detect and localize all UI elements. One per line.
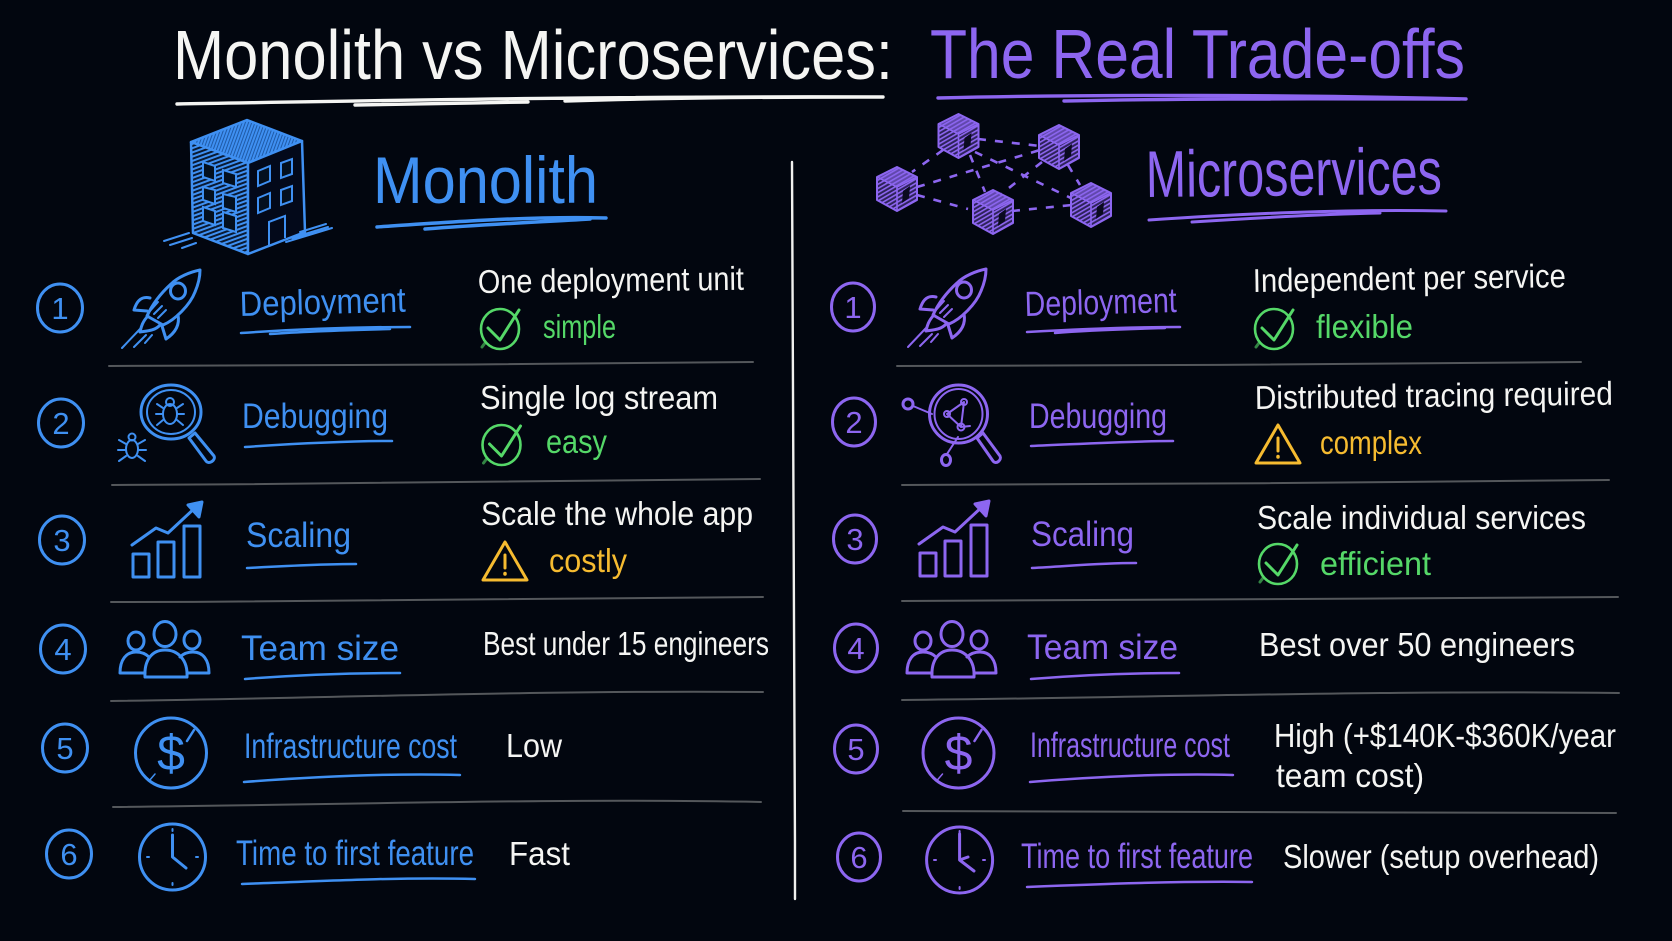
value: Single log stream — [480, 379, 718, 416]
icon: dollar: $ — [157, 725, 185, 781]
heading: monolith: Monolith — [373, 143, 598, 217]
label: Team size — [1027, 628, 1178, 667]
row 2: debugging — [832, 375, 1613, 466]
center divider — [792, 162, 795, 899]
icon: growth chart — [919, 501, 989, 576]
icon: rocket — [908, 269, 986, 347]
number 1: 1 — [844, 290, 862, 325]
number 1 — [832, 283, 874, 331]
label: Scaling — [1031, 515, 1134, 554]
label: Time to first feature — [1021, 837, 1253, 876]
row 1: deployment — [832, 257, 1566, 349]
row 3: scaling — [40, 495, 753, 580]
number 5: 5 — [847, 732, 865, 767]
icon: rocket — [122, 270, 200, 348]
badge: efficient — [1259, 544, 1431, 584]
icon: clock — [140, 824, 206, 890]
icon: dollar: $ — [945, 725, 972, 781]
icon: team — [907, 622, 996, 677]
label underline — [245, 441, 392, 447]
row 3: scaling — [834, 499, 1586, 584]
badge: easy: easy — [546, 423, 607, 460]
number 6: 6 — [60, 837, 78, 872]
icon: magnifier with network — [903, 385, 1000, 466]
label underline — [242, 878, 475, 884]
number 4 — [834, 624, 878, 672]
title underline: white — [177, 97, 883, 105]
row 5: infrastructure cost — [834, 717, 1616, 794]
badge: complex: complex — [1320, 424, 1422, 461]
number 3 — [834, 515, 876, 563]
title underline: purple — [938, 95, 1466, 101]
icon: dollar — [923, 718, 994, 788]
value: Best over 50 engineers — [1259, 626, 1575, 663]
title: The Real Trade-offs — [930, 15, 1465, 93]
label: Debugging — [242, 397, 388, 436]
number 3: 3 — [53, 523, 71, 558]
panel: microservices — [832, 114, 1619, 893]
heading underline — [377, 218, 606, 229]
label underline — [1031, 673, 1179, 679]
value: High (+$140K-$360K/year — [1274, 717, 1616, 754]
value: Fast — [509, 835, 570, 872]
number 6 — [46, 830, 92, 878]
badge: costly: costly — [549, 542, 627, 579]
number 2: 2 — [845, 405, 863, 440]
icon: building — [164, 120, 332, 254]
row 5: infrastructure cost — [42, 718, 562, 788]
value: Slower (setup overhead) — [1283, 838, 1599, 875]
icon: growth chart — [132, 502, 202, 577]
value: One deployment unit — [478, 260, 744, 300]
value: Low — [506, 727, 562, 764]
row 2: debugging — [38, 379, 718, 465]
badge: complex — [1256, 424, 1422, 463]
label underline — [1027, 882, 1252, 887]
badge: flexible — [1255, 308, 1413, 349]
label: Infrastructure cost — [244, 727, 457, 766]
label underline — [1030, 774, 1233, 782]
number 2 — [832, 398, 876, 446]
label underline — [247, 564, 356, 568]
value: team cost) — [1276, 757, 1424, 794]
row 6: time to first feature — [46, 824, 570, 890]
label: Deployment — [1024, 281, 1177, 324]
number 3 — [40, 516, 84, 564]
row 6: time to first feature — [838, 827, 1599, 893]
number 2 — [38, 399, 84, 447]
title: Monolith vs Microservices: — [173, 16, 893, 94]
value: Scale individual services — [1257, 499, 1586, 536]
label: Time to first feature — [236, 834, 474, 873]
badge: costly — [483, 542, 627, 580]
number 5 — [834, 725, 878, 773]
number 4: 4 — [847, 631, 865, 666]
badge: simple: simple — [543, 308, 616, 345]
number 2: 2 — [52, 406, 70, 441]
icon: service network — [877, 114, 1111, 234]
badge: easy — [482, 423, 607, 465]
value: Best under 15 engineers — [483, 625, 769, 662]
number 3: 3 — [846, 522, 864, 557]
value: Independent per service — [1253, 257, 1566, 299]
title — [173, 15, 1465, 94]
icon: magnifier with bug — [118, 385, 214, 462]
label: Deployment — [239, 281, 406, 324]
number 5: 5 — [56, 731, 74, 766]
label: Infrastructure cost — [1030, 726, 1230, 765]
heading: microservices: Microservices — [1145, 134, 1442, 211]
number 1: 1 — [51, 291, 69, 326]
row 4: team size — [834, 622, 1575, 679]
number 4: 4 — [54, 632, 72, 667]
number 6 — [838, 833, 880, 881]
row 4: team size — [40, 622, 769, 679]
icon: team — [120, 622, 209, 677]
value: Scale the whole app — [481, 495, 753, 532]
badge: efficient: efficient — [1320, 545, 1431, 582]
number 4 — [40, 625, 86, 673]
panel: monolith — [38, 120, 769, 890]
number 1 — [38, 284, 82, 332]
label: Team size — [241, 629, 399, 668]
value — [1274, 717, 1616, 794]
value: Distributed tracing required — [1255, 375, 1613, 416]
icon: clock — [927, 827, 993, 893]
heading underline — [1149, 211, 1446, 222]
label: Scaling — [246, 516, 351, 555]
row 1: deployment — [38, 260, 744, 349]
label underline — [241, 327, 410, 334]
label underline — [1027, 327, 1180, 333]
badge: flexible: flexible — [1316, 308, 1413, 345]
label underline — [1031, 441, 1173, 446]
icon: dollar — [136, 718, 206, 788]
label underline — [245, 673, 400, 679]
badge: simple — [481, 308, 616, 349]
number 6: 6 — [850, 840, 868, 875]
label: Debugging — [1029, 397, 1167, 436]
number 5 — [42, 724, 88, 772]
label underline — [244, 774, 460, 782]
label underline — [1032, 563, 1136, 568]
